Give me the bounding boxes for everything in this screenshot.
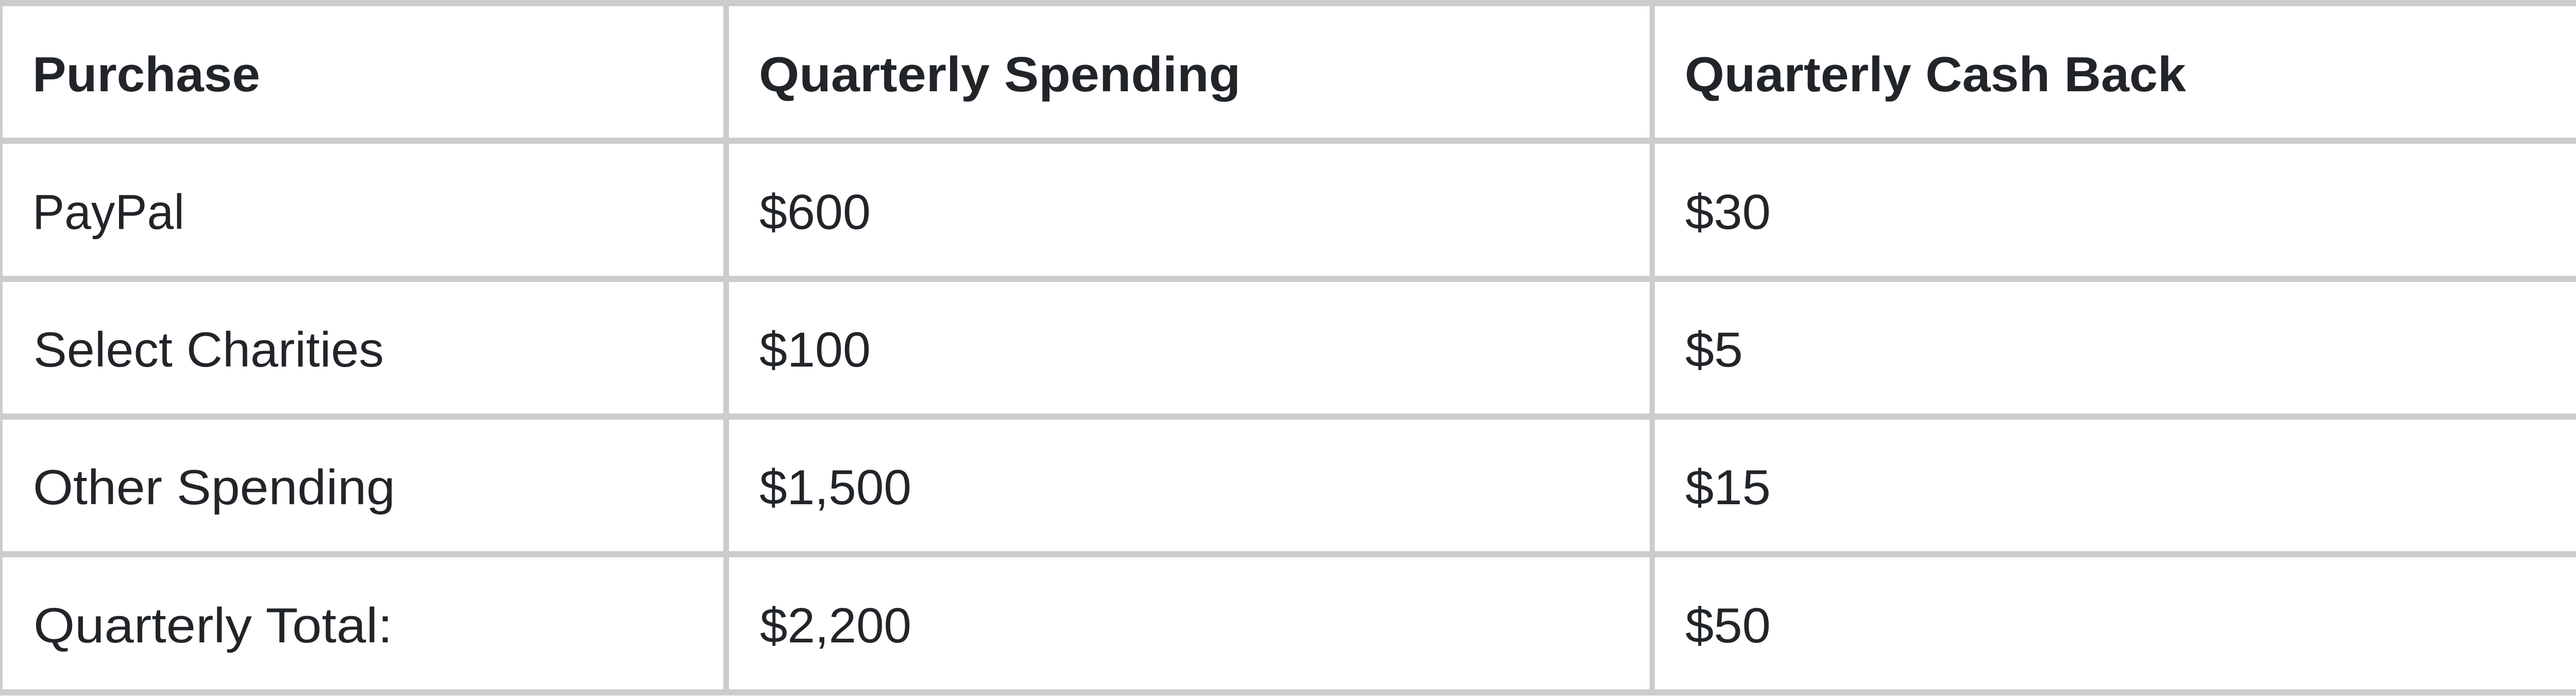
row: Select Charities [33, 322, 1743, 377]
row: PayPal: $600 [759, 185, 871, 240]
header: Quarterly Spending: Quarterly Spending [759, 47, 1241, 102]
row: Select Charities: $100 [759, 322, 871, 377]
header: Quarterly Cash Back: Quarterly Cash Back [1685, 47, 2187, 102]
row: Select Charities: $5 [1685, 322, 1743, 377]
header row [32, 47, 2187, 102]
row: PayPal [32, 185, 1771, 240]
row: Other Spending: $15 [1685, 460, 1771, 515]
row: PayPal: $30 [1685, 185, 1771, 240]
row: Select Charities: Select Charities [33, 322, 384, 377]
row: Quarterly Total: Quarterly Total: [33, 598, 393, 653]
row: PayPal: PayPal [32, 185, 184, 240]
row: Other Spending [33, 460, 1771, 515]
row: Quarterly Total [33, 598, 1771, 653]
row: Other Spending: $1,500 [759, 460, 911, 515]
header: Purchase: Purchase [32, 47, 260, 102]
row: Quarterly Total: $50 [1685, 598, 1771, 653]
row: Quarterly Total: $2,200 [760, 598, 911, 653]
row: Other Spending: Other Spending [33, 460, 395, 515]
